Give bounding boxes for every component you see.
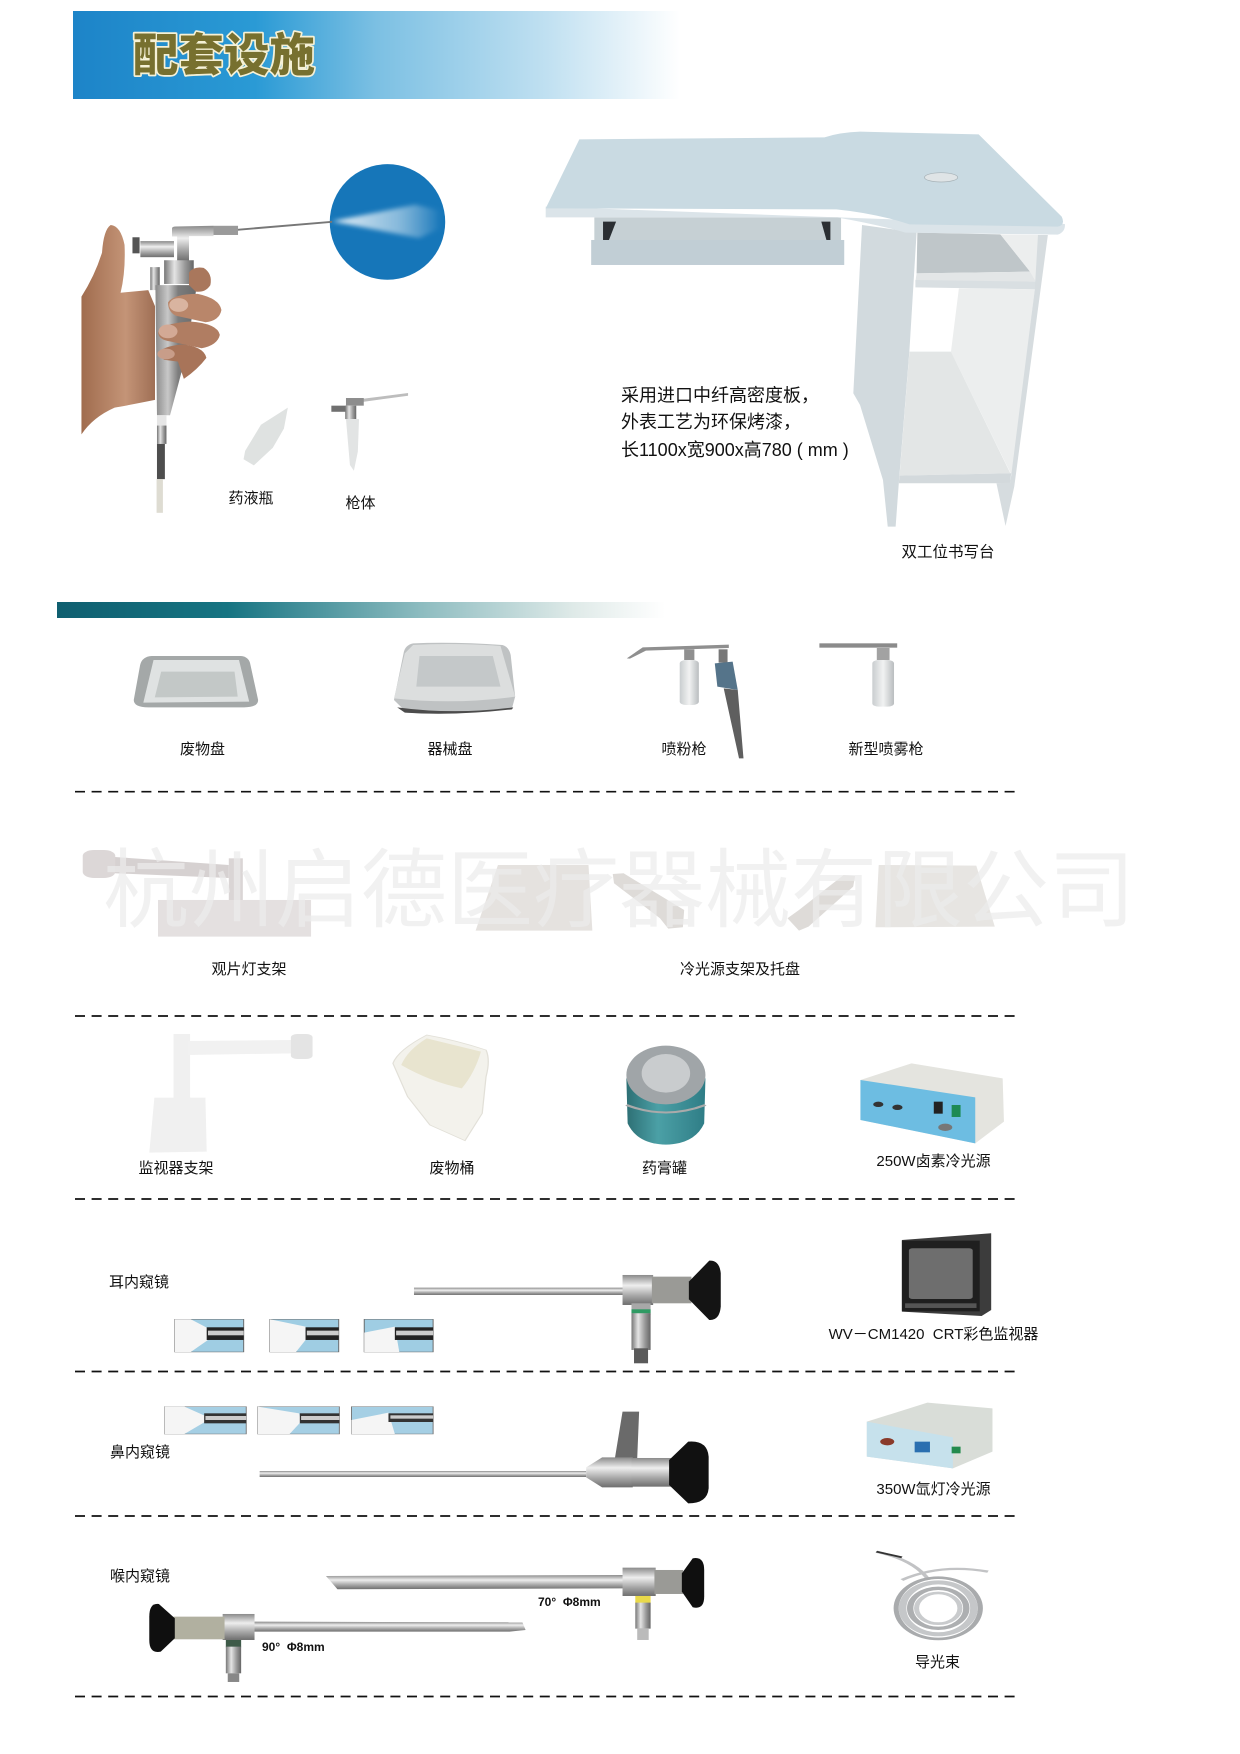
icon: medicine bottle [244, 408, 288, 465]
icon: waste tray [134, 656, 258, 707]
desk compartment back [917, 233, 1030, 273]
icon: 0 degree view [175, 1319, 244, 1352]
desk compartment side [1000, 234, 1039, 282]
desk specification text: 长1100x宽900x高780 ( mm ) [621, 440, 849, 460]
label: nose endoscope: 鼻内窥镜 [110, 1443, 170, 1461]
icon: tray plate [876, 865, 995, 927]
icon: throat endoscope 90 degree [149, 1604, 526, 1682]
label: 废物桶 [429, 1160, 475, 1177]
desk top [546, 132, 1063, 227]
desk drawer front [591, 240, 844, 265]
desk left leg [853, 225, 917, 527]
desk specification text [621, 386, 849, 460]
desk compartment shelf edge [915, 280, 1036, 289]
icon: nose 0 degree view [165, 1407, 246, 1434]
images: spray gun group [81, 164, 445, 513]
icon: throat endoscope 70 degree [326, 1558, 704, 1640]
desk top edge [546, 207, 1065, 235]
icon: ear endoscope [414, 1261, 721, 1363]
images: nose and throat endoscope rows [149, 1403, 992, 1682]
label: desk: 双工位书写台 [901, 543, 995, 561]
icon: spray gun [132, 221, 332, 513]
icon: light guide cable [876, 1552, 988, 1639]
label: gun body: 枪体 [345, 495, 376, 512]
spec 90 degree: 90° Φ8mm [262, 1640, 325, 1654]
label: throat endoscope: 喉内窥镜 [110, 1567, 170, 1585]
icon: CRT monitor [902, 1233, 991, 1316]
label: 350W氙灯冷光源 [876, 1481, 991, 1498]
header banner [73, 11, 680, 99]
label: 药膏罐 [642, 1160, 687, 1177]
watermark: 杭州启德医疗器械有限公司 [103, 843, 1135, 939]
icon: nose endoscope [260, 1412, 709, 1503]
label: ear endoscope: 耳内窥镜 [109, 1273, 169, 1291]
desk drawer interior [594, 217, 841, 242]
desk lower shelf [900, 352, 1010, 476]
icon: 70 degree view [364, 1319, 433, 1352]
icon: instrument tray [394, 643, 515, 714]
label: monitor: WV－CM1420 CRT彩色监视器 [829, 1326, 1038, 1343]
label: medicine bottle: 药液瓶 [228, 490, 274, 507]
icon: nose 70 degree view [351, 1407, 433, 1434]
icon: 250W halogen light source [860, 1063, 1004, 1143]
desk specification text: 采用进口中纤高密度板， [621, 386, 819, 406]
icon: 350W xenon light source [867, 1403, 992, 1468]
spec 70 degree: 70° Φ8mm [538, 1595, 601, 1609]
desk drawer slides [603, 222, 830, 240]
section gradient bar [57, 602, 665, 618]
label: 观片灯支架 [211, 961, 287, 978]
icon: powder gun [627, 645, 743, 758]
icon: new atomizer gun [819, 643, 897, 707]
images: row 3 and ear endoscope row [149, 1034, 1004, 1363]
label: 导光束 [915, 1654, 960, 1671]
label: 冷光源支架及托盘 [680, 960, 800, 978]
icon: bracket arm right [788, 875, 855, 931]
icon: gun body [331, 393, 408, 471]
icon: blue spray circle [330, 164, 445, 280]
icon: cold light plate [476, 865, 592, 931]
icon: film viewer bracket [83, 850, 311, 937]
label: 250W卤素冷光源 [876, 1153, 991, 1170]
desk specification text: 外表工艺为环保烤漆， [621, 412, 801, 432]
icon: nose 30 degree view [258, 1407, 339, 1434]
label: 监视器支架 [138, 1160, 214, 1177]
desk cable hole [924, 173, 958, 182]
icon: bracket arm left [613, 873, 684, 929]
image: double station desk [546, 132, 1065, 527]
icon: monitor bracket [149, 1034, 313, 1153]
label: 喷粉枪 [661, 741, 707, 758]
label: 新型喷雾枪 [848, 741, 924, 758]
images: row 1 and row 2 equipment [83, 643, 995, 937]
title: 配套设施 [133, 19, 315, 85]
desk right edge and foot [996, 235, 1048, 526]
desk lower shelf edge [899, 473, 1011, 483]
label: 废物盘 [180, 740, 225, 758]
desk compartment floor [915, 272, 1036, 282]
icon: ointment jar [626, 1046, 705, 1145]
desk inner panel [951, 288, 1035, 477]
icon: hand [81, 225, 221, 434]
icon: 30 degree view [270, 1319, 339, 1352]
icon: waste bin [393, 1035, 488, 1141]
label: 器械盘 [427, 740, 473, 758]
